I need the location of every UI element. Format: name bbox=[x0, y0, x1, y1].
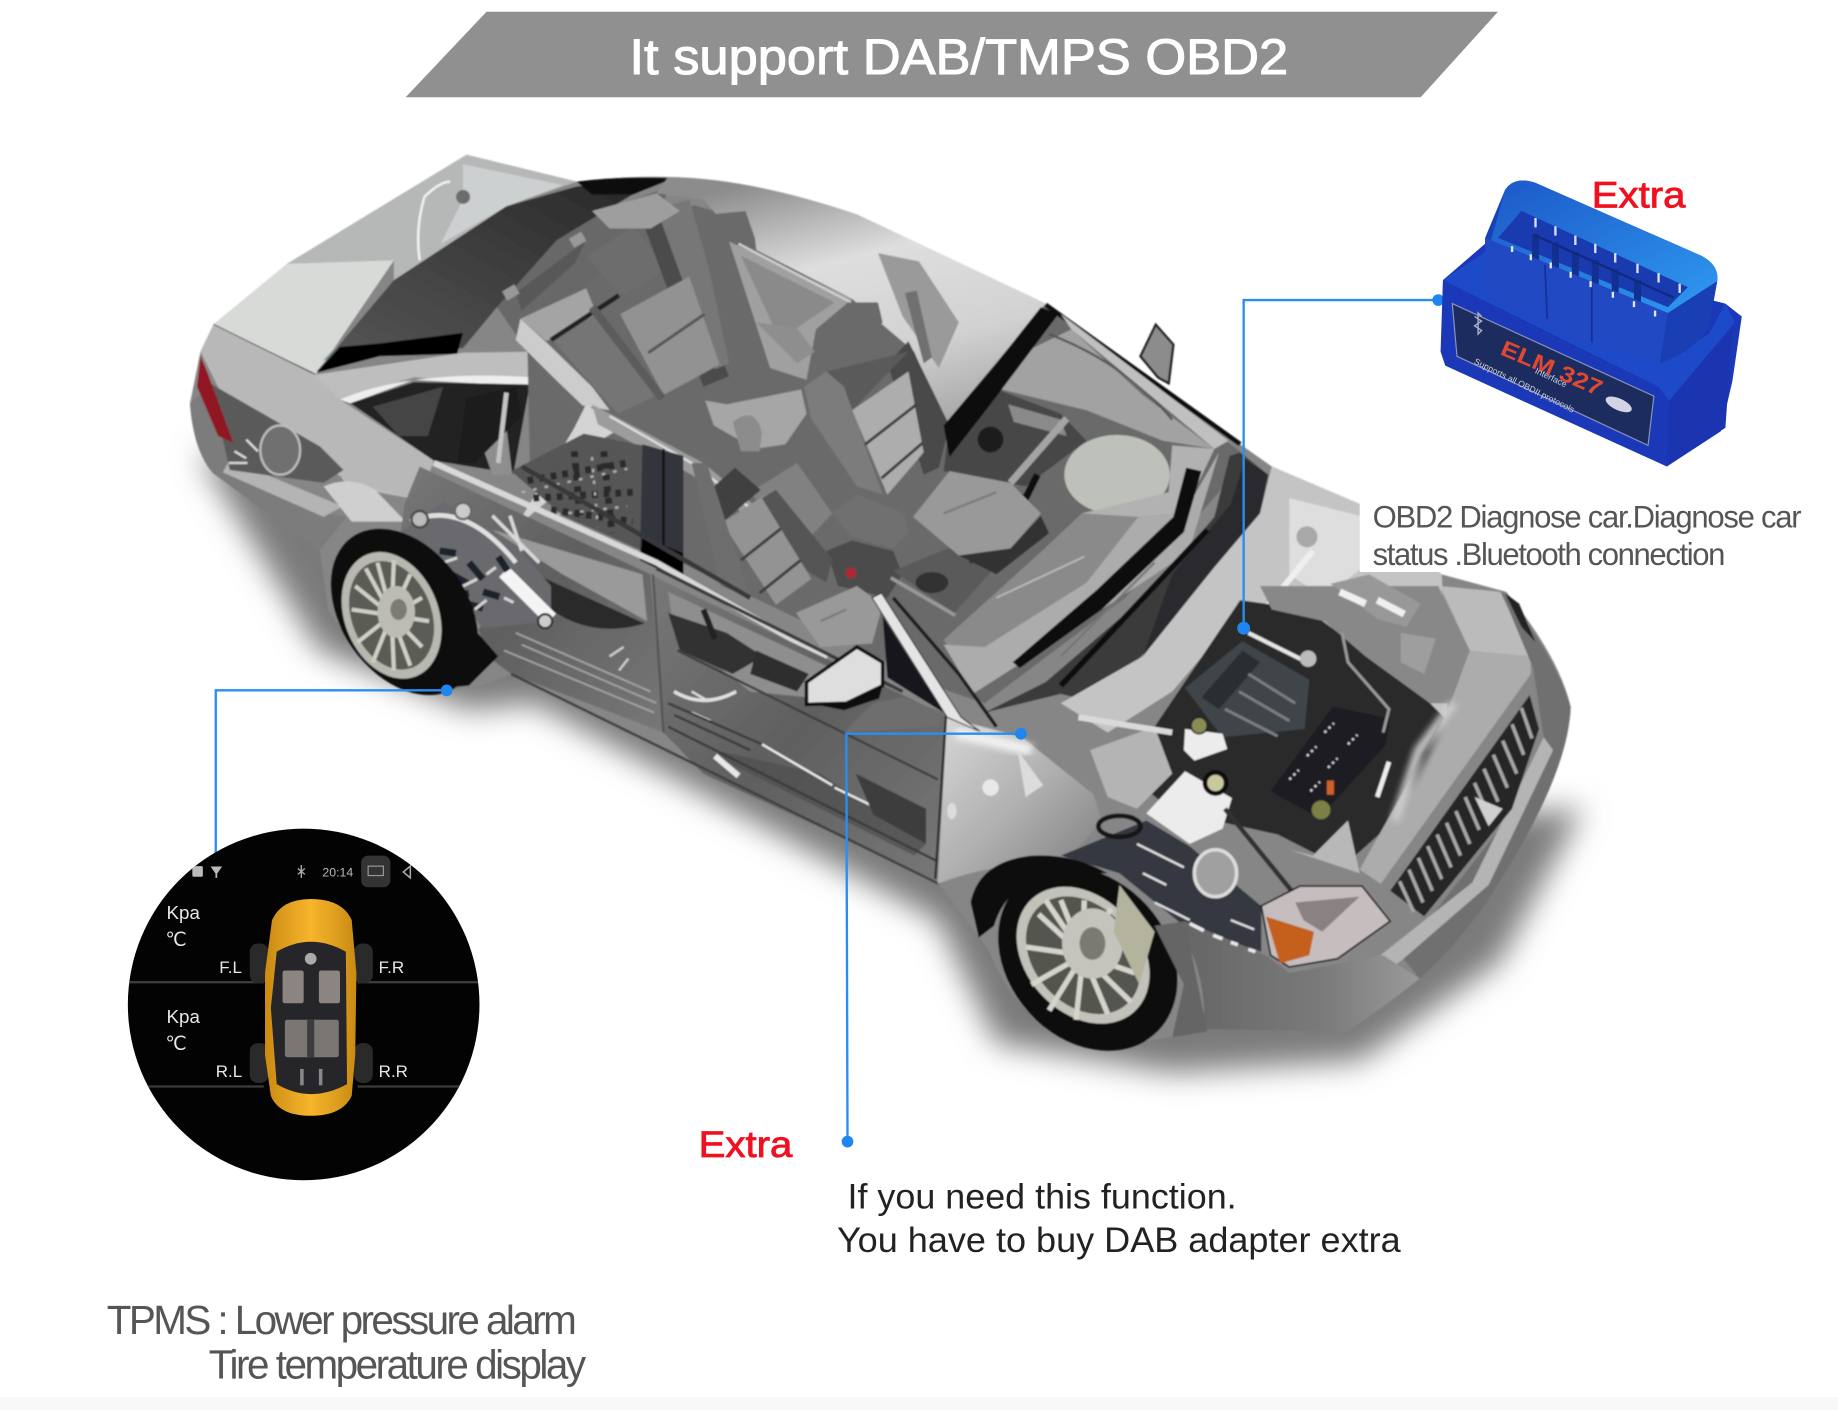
Extra label: OBD2: Extra bbox=[1592, 173, 1686, 215]
DAB text bbox=[837, 1177, 1401, 1260]
brake reservoirs bbox=[1184, 729, 1227, 761]
rear quarter panel bbox=[201, 325, 434, 500]
dash shell band bbox=[1082, 445, 1214, 517]
OBD2 text bbox=[1373, 499, 1802, 572]
rear wheel bbox=[300, 501, 509, 723]
B pillar junction bbox=[516, 319, 610, 410]
car ground shadow bbox=[197, 451, 1582, 1072]
footwell far bbox=[944, 387, 1087, 486]
TPMS labels: ℃ bbox=[165, 929, 186, 950]
rear door bbox=[399, 466, 663, 733]
headlight bbox=[1261, 886, 1390, 967]
footwell near and carpet bbox=[913, 471, 1041, 556]
rear footwell window debris bbox=[511, 434, 642, 551]
OBD2 text: OBD2 Diagnose car.Diagnose car bbox=[1373, 499, 1802, 534]
far door panel bbox=[729, 241, 852, 380]
inner fender band bbox=[1360, 590, 1531, 884]
TPMS labels: ℃ bbox=[165, 1033, 186, 1054]
fender window gap bbox=[844, 697, 944, 733]
TPMS text: TPMS : Lower pressure alarm bbox=[107, 1297, 577, 1343]
translucent top of bay bbox=[1260, 586, 1470, 703]
connector: OBD2 bbox=[1237, 294, 1444, 635]
center console bbox=[750, 463, 832, 551]
rear side window bbox=[340, 376, 537, 403]
TPMS labels: R.R bbox=[379, 1062, 408, 1081]
windshield base band bbox=[985, 452, 1268, 713]
front lower flare bbox=[1155, 921, 1207, 1037]
front bumper bbox=[1178, 921, 1419, 1031]
adapter label: ELM 327 bbox=[1497, 336, 1606, 401]
front wheel bbox=[961, 831, 1214, 1087]
rear window bbox=[317, 180, 656, 372]
TPMS labels: R.L bbox=[216, 1062, 242, 1081]
car cutaway illustration bbox=[190, 155, 1582, 1087]
A pillar bbox=[872, 593, 980, 731]
battery bbox=[1330, 574, 1421, 627]
side mirror bbox=[806, 647, 883, 704]
front far seat bbox=[804, 302, 949, 495]
roof bbox=[656, 177, 1046, 425]
TPMS top-view car bbox=[250, 899, 373, 1116]
body side behind quarter bbox=[313, 352, 598, 500]
front fender bbox=[938, 717, 1102, 884]
cup holder area bbox=[893, 544, 995, 613]
tail lamp bbox=[197, 356, 233, 443]
TPMS labels bbox=[165, 902, 408, 1081]
trunk lid bbox=[287, 155, 577, 280]
C pillar strip bbox=[497, 188, 668, 352]
adapter plug bbox=[1485, 180, 1717, 363]
adapter label: Supports all OBDII protocols bbox=[1472, 356, 1577, 415]
fender highlight bbox=[324, 481, 406, 522]
far mirror bbox=[1141, 325, 1173, 383]
rear suspension bbox=[400, 502, 552, 639]
OBD2 text: status .Bluetooth connection bbox=[1373, 537, 1725, 572]
big carpet bbox=[944, 513, 1138, 656]
front wheel arch bbox=[971, 855, 1108, 938]
rear lower panel bbox=[190, 383, 347, 551]
airbag shell bbox=[1064, 435, 1170, 515]
rear seat bbox=[502, 193, 806, 451]
seat belt smear bbox=[878, 253, 959, 368]
title banner: It support DAB/TMPS OBD2 bbox=[629, 28, 1288, 85]
connector: TPMS bbox=[216, 684, 453, 867]
adapter label: Interface bbox=[1533, 365, 1569, 389]
outer fender bbox=[1401, 590, 1571, 979]
far pillar bbox=[694, 211, 770, 376]
fuel rail bbox=[1271, 707, 1390, 818]
door sill highlight bbox=[434, 463, 826, 659]
black B pillar bbox=[640, 444, 683, 579]
connector: DAB bbox=[842, 728, 1027, 1147]
DAB text: If you need this function. bbox=[848, 1177, 1237, 1216]
front door bbox=[654, 577, 947, 880]
TPMS labels: Kpa bbox=[167, 902, 200, 923]
cabin interior bbox=[528, 205, 1240, 703]
near front seat cushion bbox=[796, 586, 883, 647]
TPMS text: Tire temperature display bbox=[209, 1341, 587, 1387]
OBD2 label backing bbox=[1360, 498, 1838, 572]
TPMS labels: F.L bbox=[219, 958, 242, 977]
TPMS labels: F.R bbox=[379, 958, 404, 977]
title banner bbox=[406, 12, 1498, 97]
adapter label bbox=[1452, 304, 1654, 445]
TPMS labels: Kpa bbox=[167, 1006, 200, 1027]
car body base bbox=[190, 155, 1571, 1044]
near rear seat bbox=[692, 463, 832, 605]
grille bbox=[1390, 695, 1539, 917]
hood left translucent band bbox=[1061, 466, 1448, 820]
rear lamp panel bbox=[210, 383, 344, 483]
TPMS screen circle bbox=[117, 829, 492, 1180]
TPMS text bbox=[107, 1297, 587, 1387]
TPMS status bar: 20:14 bbox=[322, 866, 353, 880]
lower engine and strut bbox=[1061, 820, 1261, 952]
intake manifold bbox=[1185, 641, 1309, 737]
icon: ELM327 OBD2 adapter bbox=[1441, 180, 1742, 466]
upper dash bbox=[990, 329, 1214, 449]
engine bay background bbox=[1114, 600, 1453, 867]
TPMS divider lines bbox=[117, 982, 492, 1087]
DAB text: You have to buy DAB adapter extra bbox=[837, 1221, 1401, 1260]
TPMS status bar bbox=[192, 856, 410, 887]
Extra label: DAB: Extra bbox=[699, 1123, 793, 1165]
A pillar top strip bbox=[944, 307, 1058, 457]
light bumper bbox=[1376, 737, 1553, 973]
